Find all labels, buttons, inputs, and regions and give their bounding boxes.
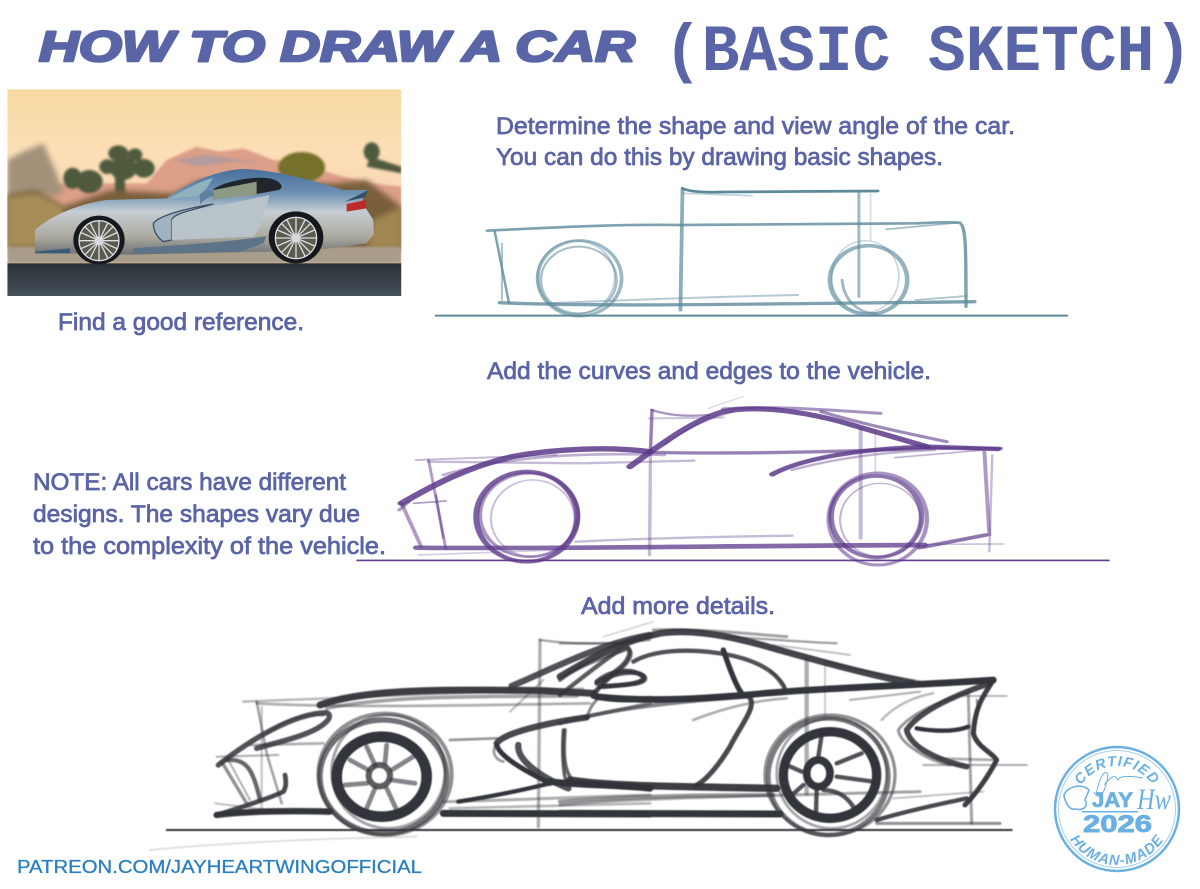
note about car designs <box>33 469 386 560</box>
sketch 1: basic box shapes <box>436 188 1067 316</box>
instruction: determine the shape <box>496 113 1015 171</box>
badge: certified human-made: Hw <box>1136 783 1171 816</box>
title: how to draw a car: HOW TO DRAW A CAR <box>39 23 635 71</box>
caption: find a good reference: Find a good reference. <box>58 309 304 336</box>
badge: certified human-made: 2026 <box>1083 811 1152 838</box>
instruction: determine the shape: You can do this by drawing basic shapes. <box>496 144 943 171</box>
badge: certified human-made: HUMAN-MADE <box>1070 834 1163 865</box>
patreon link: PATREON.COM/JAYHEARTWINGOFFICIAL <box>17 857 422 877</box>
note about car designs: designs. The shapes vary due <box>33 501 360 528</box>
note about car designs: to the complexity of the vehicle. <box>33 533 386 560</box>
instruction: determine the shape: Determine the shape and view angle of the car. <box>496 113 1015 140</box>
badge: certified human-made: CERTIFIED <box>1076 756 1158 784</box>
instruction: add curves and edges: Add the curves and edges to the vehicle. <box>487 358 931 385</box>
reference photo of the car <box>7 89 401 296</box>
badge: certified human-made: JAY <box>1092 789 1133 812</box>
instruction: add more details: Add more details. <box>581 593 775 620</box>
badge: certified human-made <box>1054 746 1180 872</box>
sketch 2: curves and edges <box>357 397 1109 565</box>
sketch 3: detailed car <box>150 622 1027 850</box>
note about car designs: NOTE: All cars have different <box>33 469 346 496</box>
